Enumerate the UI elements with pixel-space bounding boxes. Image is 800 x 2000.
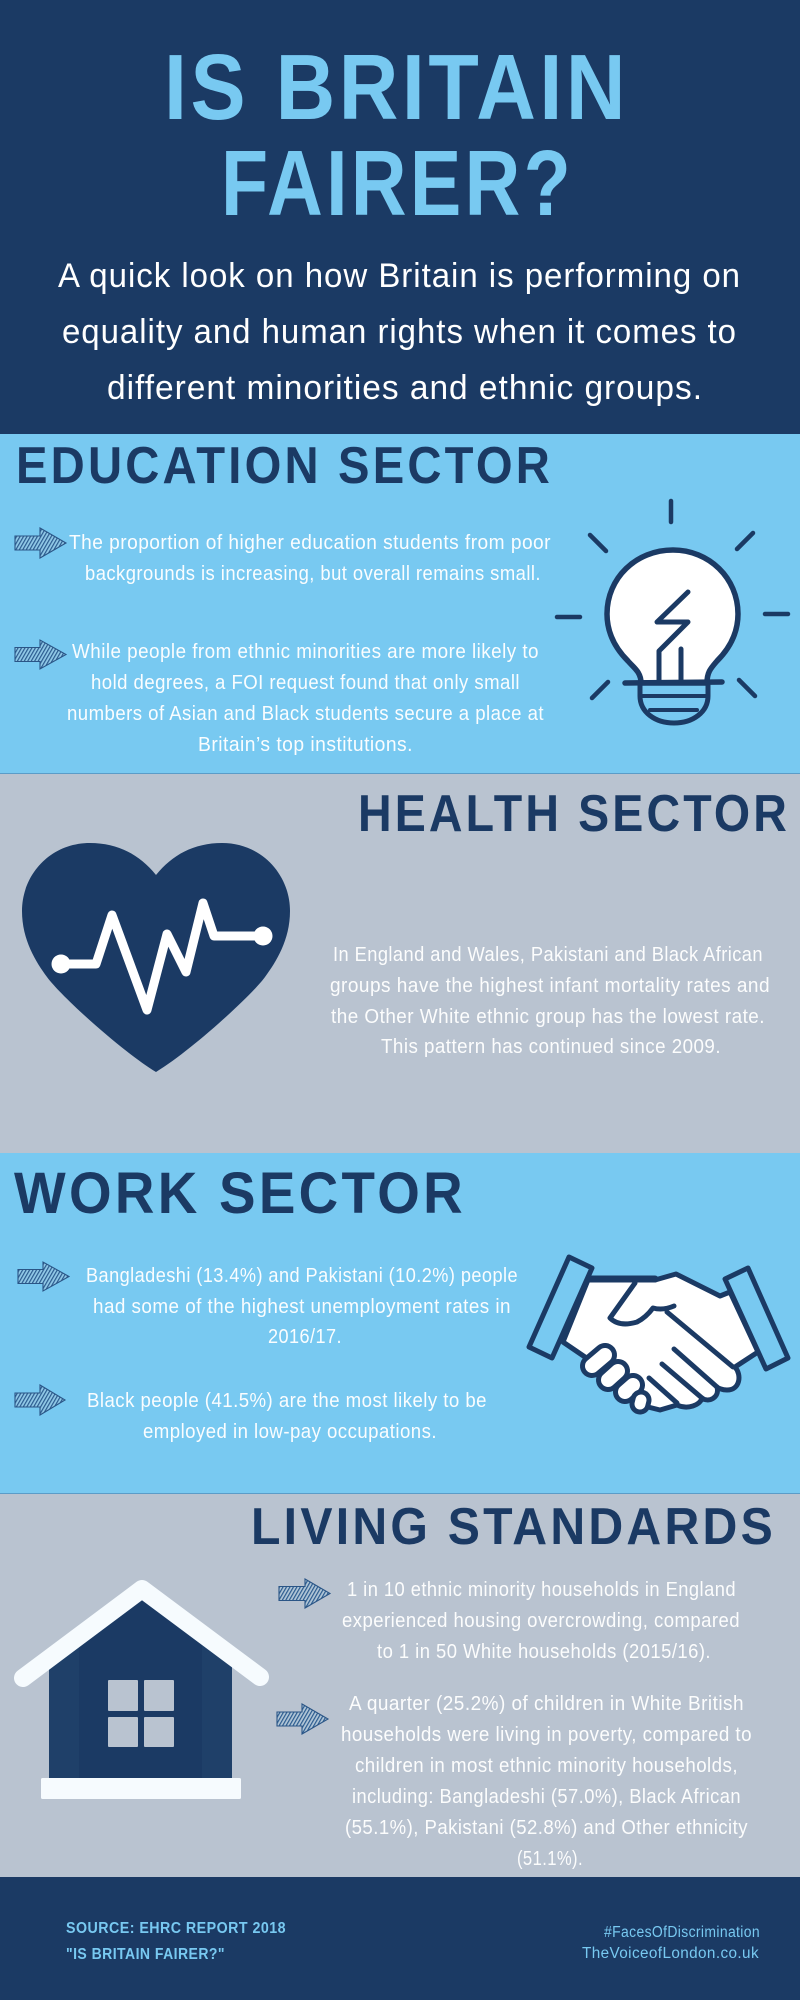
arrow: education point 2 xyxy=(15,640,66,669)
icon: light bulb xyxy=(557,501,788,723)
subtitle: equality and human rights when it comes to xyxy=(62,313,737,351)
title: IS BRITAIN xyxy=(164,35,629,139)
text: education point 2 xyxy=(67,640,544,756)
icon: house xyxy=(23,1589,260,1799)
panel: education sector xyxy=(0,434,800,774)
panel: header xyxy=(0,0,800,434)
text: living point 2: (51.1%). xyxy=(517,1847,583,1870)
panel: health sector xyxy=(0,774,800,1153)
text: living point 1: to 1 in 50 White households (2015/16). xyxy=(377,1640,711,1663)
text: work point 2 xyxy=(87,1389,487,1443)
text: living point 2: households were living in poverty, compared to xyxy=(341,1723,752,1746)
text: education point 1: backgrounds is increasing, but overall remains small. xyxy=(85,562,541,585)
text: education point 2: numbers of Asian and Black students secure a place at xyxy=(67,702,544,725)
source credit: "IS BRITAIN FAIRER?" xyxy=(66,1946,225,1963)
text: living point 2: (55.1%), Pakistani (52.8%) and Other ethnicity xyxy=(345,1816,748,1839)
icon: heart with pulse xyxy=(22,843,290,1072)
arrow: education point 1 xyxy=(15,528,66,558)
subtitle xyxy=(58,257,741,407)
arrow: living point 1 xyxy=(279,1579,330,1608)
title xyxy=(164,35,629,235)
text: living point 1: experienced housing overcrowding, compared xyxy=(342,1609,740,1632)
subtitle: A quick look on how Britain is performing on xyxy=(58,257,741,295)
text: work point 2: employed in low-pay occupations. xyxy=(143,1420,437,1443)
text: work point 1: had some of the highest unemployment rates in xyxy=(93,1295,511,1318)
text: living point 2 xyxy=(341,1692,752,1870)
text: living point 1 xyxy=(342,1578,740,1663)
text: education point 1 xyxy=(69,531,551,585)
title: FAIRER? xyxy=(221,131,574,235)
heading: education sector: EDUCATION SECTOR xyxy=(16,437,553,495)
hashtag and website: TheVoiceofLondon.co.uk xyxy=(582,1945,759,1962)
text: work point 2: Black people (41.5%) are the most likely to be xyxy=(87,1389,487,1412)
text: health body: groups have the highest infant mortality rates and xyxy=(330,974,770,997)
text: living point 2: including: Bangladeshi (57.0%), Black African xyxy=(352,1785,741,1808)
text: work point 1 xyxy=(86,1264,518,1348)
text: work point 1: Bangladeshi (13.4%) and Pakistani (10.2%) people xyxy=(86,1264,518,1287)
text: work point 1: 2016/17. xyxy=(268,1325,342,1348)
text: living point 2: children in most ethnic minority households, xyxy=(355,1754,738,1777)
source credit: SOURCE: EHRC REPORT 2018 xyxy=(66,1920,286,1937)
text: living point 1: 1 in 10 ethnic minority households in England xyxy=(347,1578,736,1601)
text: education point 2: hold degrees, a FOI request found that only small xyxy=(91,671,520,694)
text: education point 1: The proportion of higher education students from poor xyxy=(69,531,551,554)
panel: footer xyxy=(0,1877,800,2000)
text: education point 2: While people from ethnic minorities are more likely to xyxy=(72,640,539,663)
panel: living standards xyxy=(0,1494,800,1877)
icon: handshake xyxy=(529,1257,788,1410)
text: living point 2: A quarter (25.2%) of children in White British xyxy=(349,1692,744,1715)
source credit xyxy=(66,1920,286,1963)
text: health body: This pattern has continued since 2009. xyxy=(381,1035,721,1058)
subtitle: different minorities and ethnic groups. xyxy=(107,369,703,407)
panel: work sector xyxy=(0,1153,800,1494)
arrow: living point 2 xyxy=(277,1704,328,1734)
arrow: work point 1 xyxy=(18,1262,69,1291)
heading: work sector: WORK SECTOR xyxy=(14,1161,466,1226)
text: health body: the Other White ethnic group has the lowest rate. xyxy=(331,1005,765,1028)
hashtag and website xyxy=(582,1924,760,1962)
hashtag and website: #FacesOfDiscrimination xyxy=(604,1924,760,1941)
text: health body xyxy=(330,943,770,1058)
arrow: work point 2 xyxy=(15,1385,65,1415)
text: education point 2: Britain’s top institutions. xyxy=(198,733,413,756)
